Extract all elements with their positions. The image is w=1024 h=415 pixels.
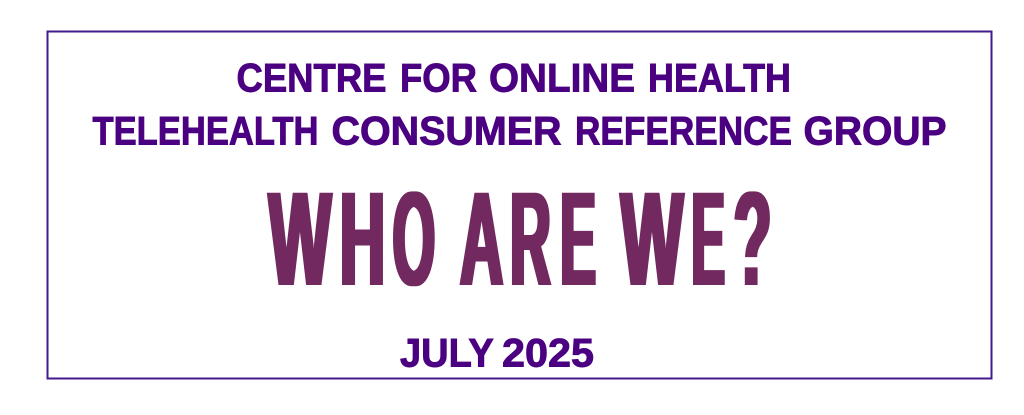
heading: group name: TELEHEALTH [92, 110, 318, 154]
heading: group name: GROUP [804, 110, 946, 154]
heading: organisation name: CENTRE [236, 57, 386, 101]
title: E [692, 165, 725, 314]
date: JULY [400, 332, 494, 376]
title: W [621, 165, 684, 314]
title: A [460, 165, 503, 314]
heading: group name: REFERENCE [575, 110, 792, 154]
heading: group name: CONSUMER [332, 110, 562, 154]
panel: border frame [48, 32, 992, 378]
text: ? [734, 165, 772, 314]
title: W [269, 165, 332, 314]
date: 2025 [502, 332, 594, 376]
heading: organisation name: ONLINE [489, 57, 635, 101]
heading: organisation name: FOR [400, 57, 477, 101]
title: R [510, 165, 551, 314]
title: H [340, 165, 385, 314]
title: O [393, 165, 435, 314]
heading: organisation name: HEALTH [648, 57, 791, 101]
title: E [560, 165, 596, 314]
